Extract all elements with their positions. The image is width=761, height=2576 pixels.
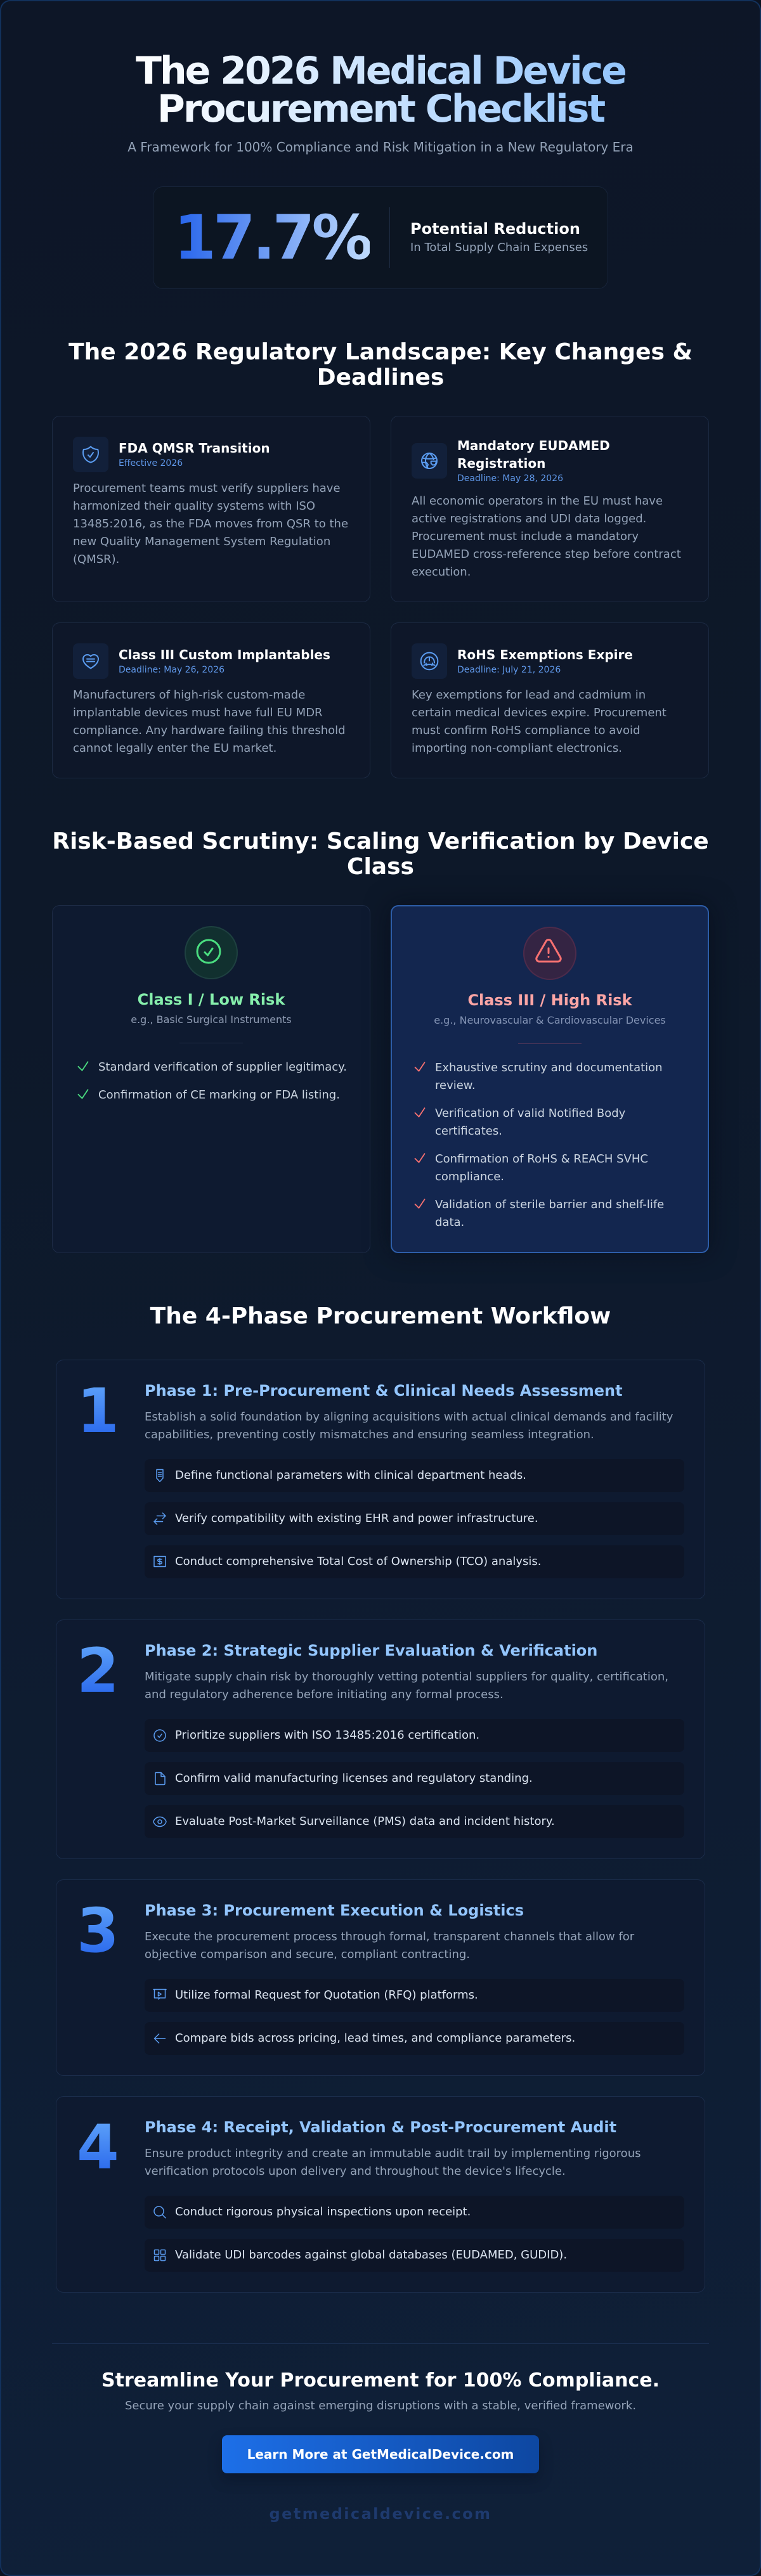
panel: mandatory EUDAMED registration (391, 416, 709, 602)
phase number: 4 (77, 2112, 119, 2183)
checklist item (415, 1061, 663, 1092)
step: define parameters: Define functional parameters with clinical department heads. (175, 1469, 526, 1482)
subtitle: A Framework for 100% Compliance and Risk Mitigation in a New Regulatory Era (127, 139, 634, 155)
panel: phase 1 (56, 1360, 705, 1599)
checklist item: Confirmation of RoHS & REACH SVHC (435, 1152, 648, 1166)
card text (73, 482, 348, 566)
step: define parameters (145, 1459, 684, 1492)
class example: e.g., Neurovascular & Cardiovascular Devices (434, 1014, 666, 1026)
phase text: and regulatory adherence before initiating any formal process. (145, 1688, 504, 1701)
card date: Deadline: July 21, 2026 (457, 665, 561, 675)
card text (412, 688, 667, 755)
big number: 17.7% (174, 202, 370, 273)
checklist item: Verification of valid Notified Body (435, 1107, 625, 1120)
step: TCO analysis (145, 1545, 684, 1578)
checklist item: Exhaustive scrutiny and documentation (435, 1061, 663, 1074)
phase text: Mitigate supply chain risk by thoroughly vetting potential suppliers for quality, certification, (145, 1670, 668, 1684)
button: Learn More at GetMedicalDevice.com (247, 2447, 514, 2462)
stat panel: 17.7% potential reduction (153, 186, 608, 289)
panel: class III high risk (391, 905, 709, 1253)
card text: new Quality Management System Regulation (73, 535, 330, 548)
heading: regulatory landscape: Deadlines (317, 364, 444, 390)
class title: Class III / High Risk (467, 991, 632, 1009)
step: physical inspections (145, 2196, 684, 2229)
phase title: Phase 4: Receipt, Validation & Post-Procurement Audit (145, 2118, 616, 2136)
phase number: 2 (77, 1635, 119, 1706)
phase text (145, 2147, 641, 2178)
checklist item: data. (435, 1216, 464, 1229)
step: compare bids: Compare bids across pricing, lead times, and compliance parameters. (175, 2032, 575, 2045)
card text: Procurement must include a mandatory (412, 530, 639, 543)
phase number: 1 (77, 1375, 119, 1446)
title: Procurement Checklist (157, 87, 604, 131)
icon: shield check (73, 437, 108, 472)
checklist item (415, 1198, 664, 1229)
class title: Class I / Low Risk (138, 991, 285, 1008)
step: confirm licenses: Confirm valid manufacturing licenses and regulatory standing. (175, 1772, 533, 1785)
heading: regulatory landscape: The 2026 Regulatory Landscape: Key Changes & (68, 339, 693, 365)
card title: RoHS Exemptions Expire (457, 647, 633, 662)
phase number: 3 (77, 1895, 119, 1966)
card text: Procurement teams must verify suppliers have (73, 482, 341, 495)
button (222, 2435, 539, 2473)
card text: All economic operators in the EU must have (412, 494, 663, 508)
panel: phase 3 (56, 1879, 705, 2076)
call to action heading: Streamline Your Procurement for 100% Compliance. (101, 2369, 660, 2392)
card text: importing non-compliant electronics. (412, 742, 622, 755)
icon: RoHS badge (412, 643, 447, 679)
card text: execution. (412, 565, 471, 579)
card title: FDA QMSR Transition (119, 441, 270, 456)
step: physical inspections: Conduct rigorous physical inspections upon receipt. (175, 2205, 471, 2219)
step: verify compatibility: Verify compatibility with existing EHR and power infrastructure. (175, 1512, 538, 1525)
card date: Deadline: May 28, 2026 (457, 473, 563, 484)
panel: phase 4 (56, 2096, 705, 2293)
phase title: Phase 1: Pre-Procurement & Clinical Needs Assessment (145, 1382, 623, 1400)
panel: FDA QMSR transition (52, 416, 370, 602)
call to action text: Secure your supply chain against emerging disruptions with a stable, verified framework. (125, 2399, 636, 2412)
card text: EUDAMED cross-reference step before contract (412, 548, 681, 561)
checklist item (415, 1152, 648, 1183)
checklist item: review. (435, 1079, 476, 1092)
footer brand: getmedicaldevice.com (270, 2505, 491, 2523)
card text: 13485:2016, as the FDA moves from QSR to the (73, 517, 348, 531)
stat label: Potential Reduction (410, 220, 580, 238)
phase text: verification protocols upon delivery and throughout the device's lifecycle. (145, 2165, 566, 2178)
phase text: objective comparison and secure, compliant contracting. (145, 1948, 470, 1961)
card title (457, 438, 610, 471)
card text: must confirm RoHS compliance to avoid (412, 724, 640, 737)
step: prioritize suppliers: Prioritize suppliers with ISO 13485:2016 certification. (175, 1729, 479, 1742)
step: prioritize suppliers (145, 1719, 684, 1752)
card title: Mandatory EUDAMED (457, 438, 610, 453)
checklist item: Validation of sterile barrier and shelf-life (435, 1198, 664, 1211)
checklist item (415, 1107, 625, 1138)
phase text: Execute the procurement process through formal, transparent channels that allow for (145, 1930, 634, 1943)
checklist item: compliance. (435, 1170, 504, 1183)
panel: class III custom implantables (52, 622, 370, 778)
icon: heart (73, 643, 108, 679)
heading: workflow: The 4-Phase Procurement Workflow (150, 1303, 611, 1329)
phase text (145, 1930, 634, 1961)
phase text (145, 1410, 673, 1441)
card text: certain medical devices expire. Procurement (412, 706, 667, 719)
phase text (145, 1670, 668, 1701)
phase text: Establish a solid foundation by aligning acquisitions with actual clinical demands and facility (145, 1410, 673, 1424)
card title: Registration (457, 456, 545, 471)
step: validate UDI: Validate UDI barcodes against global databases (EUDAMED, GUDID). (175, 2248, 567, 2262)
phase title: Phase 3: Procurement Execution & Logistics (145, 1902, 524, 1919)
step: TCO analysis: Conduct comprehensive Total Cost of Ownership (TCO) analysis. (175, 1555, 542, 1568)
title: The 2026 Medical Device (136, 49, 625, 93)
icon: warning triangle (523, 927, 576, 980)
card text: Manufacturers of high-risk custom-made (73, 688, 305, 702)
card text: harmonized their quality systems with ISO (73, 499, 315, 513)
card text: active registrations and UDI data logged. (412, 512, 646, 525)
panel: class I low risk (52, 905, 370, 1253)
class example: e.g., Basic Surgical Instruments (131, 1014, 292, 1026)
card title: Class III Custom Implantables (119, 647, 330, 662)
phase text: capabilities, preventing costly mismatches and ensuring seamless integration. (145, 1428, 594, 1441)
heading: risk-based scrutiny: Class (347, 854, 414, 880)
step: evaluate PMS (145, 1805, 684, 1838)
checklist item: certificates. (435, 1124, 502, 1138)
phase text: Ensure product integrity and create an immutable audit trail by implementing rigorous (145, 2147, 641, 2160)
card date: Deadline: May 26, 2026 (119, 665, 224, 675)
step: validate UDI (145, 2239, 684, 2272)
heading: regulatory landscape (68, 339, 693, 390)
checklist item: Standard verification of supplier legitimacy. (98, 1060, 347, 1074)
step: evaluate PMS: Evaluate Post-Market Surveillance (PMS) data and incident history. (175, 1815, 555, 1828)
card text (412, 494, 681, 579)
checklist item: Confirmation of CE marking or FDA listing. (98, 1088, 340, 1102)
step: verify compatibility (145, 1502, 684, 1535)
icon: globe (412, 443, 447, 479)
card text: cannot legally enter the EU market. (73, 742, 276, 755)
title (136, 52, 625, 128)
heading: risk-based scrutiny: Risk-Based Scrutiny: Scaling Verification by Device (52, 828, 709, 854)
card text: Key exemptions for lead and cadmium in (412, 688, 646, 702)
card text: implantable devices must have full EU MDR (73, 706, 323, 719)
icon: check circle (185, 926, 238, 979)
card text: compliance. Any hardware failing this threshold (73, 724, 346, 737)
step: confirm licenses (145, 1762, 684, 1795)
card date: Effective 2026 (119, 458, 183, 468)
panel: RoHS exemptions expire (391, 622, 709, 778)
phase title: Phase 2: Strategic Supplier Evaluation & Verification (145, 1642, 597, 1659)
stat sublabel: In Total Supply Chain Expenses (410, 241, 588, 254)
heading: risk-based scrutiny (52, 828, 709, 880)
card text: (QMSR). (73, 553, 119, 566)
step: RFQ platforms: Utilize formal Request for Quotation (RFQ) platforms. (175, 1988, 478, 2002)
step: compare bids (145, 2022, 684, 2055)
card text (73, 688, 346, 755)
step: RFQ platforms (145, 1979, 684, 2012)
panel: phase 2 (56, 1620, 705, 1859)
